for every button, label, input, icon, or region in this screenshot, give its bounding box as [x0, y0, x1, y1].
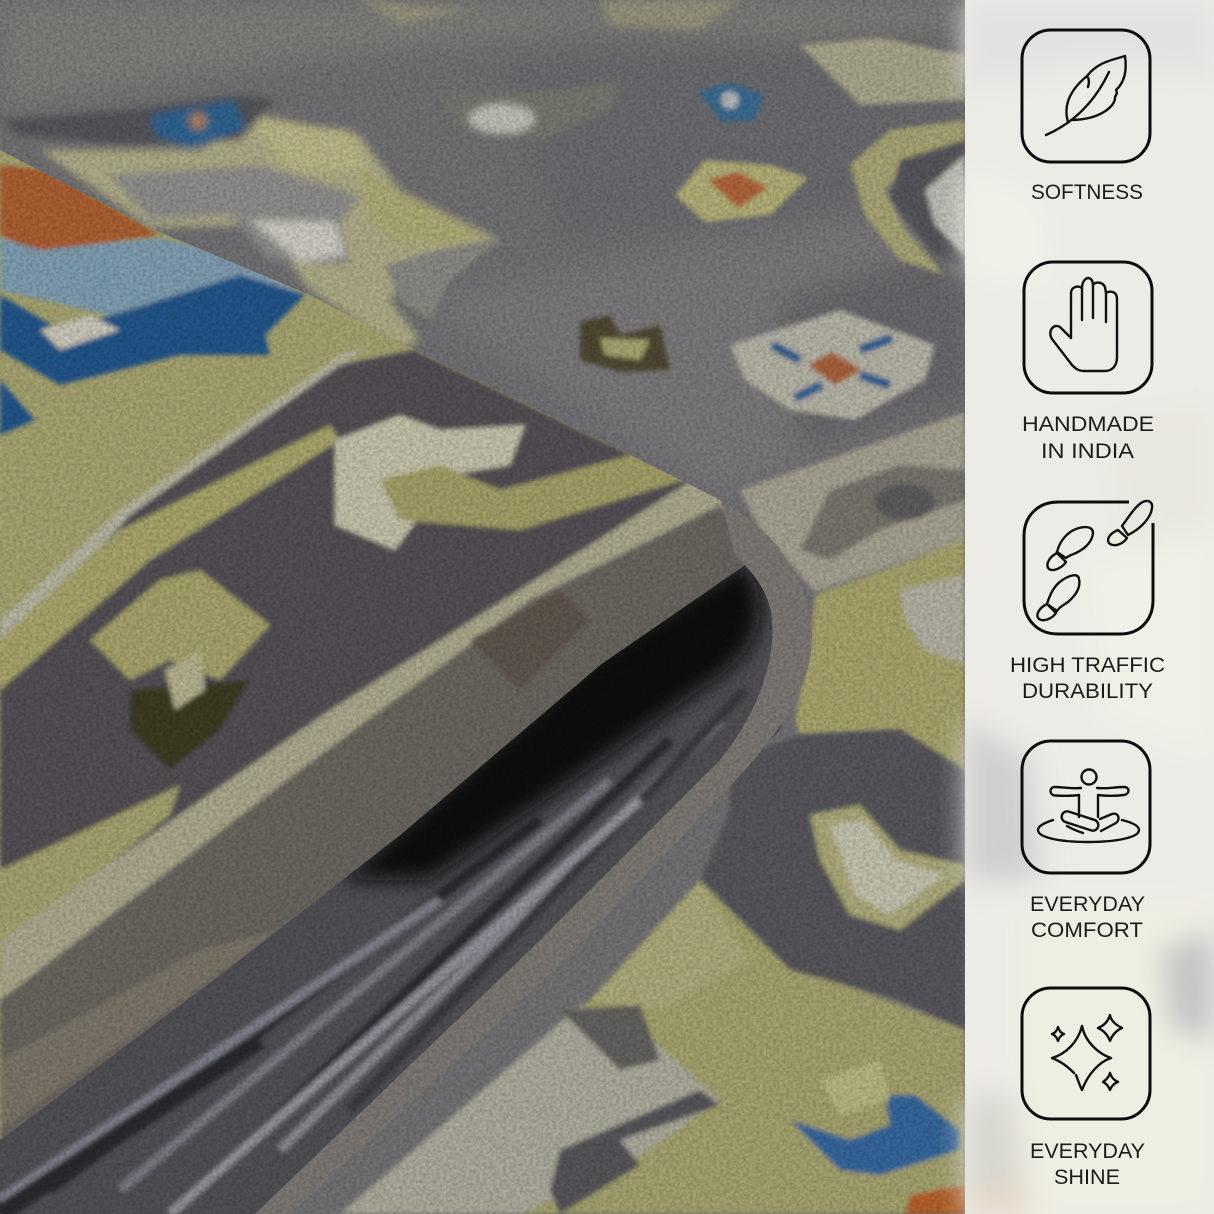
label: everyday comfort: COMFORT [1031, 919, 1143, 942]
label: everyday shine: EVERYDAY [1030, 1140, 1145, 1163]
icon: handmade hand [1024, 262, 1152, 393]
dark cavity under fold [340, 560, 760, 880]
icon: footprints durability [1024, 501, 1153, 634]
label: everyday comfort: EVERYDAY [1030, 893, 1145, 916]
rug photograph [0, 0, 965, 1214]
label: high traffic durability [1010, 654, 1165, 703]
texture [0, 0, 965, 1214]
label: handmade in india [1022, 413, 1154, 463]
panel: features sidebar [965, 0, 1214, 1214]
label: softness: SOFTNESS [1031, 181, 1143, 204]
label: everyday shine [1030, 1140, 1145, 1189]
lower right motif [340, 730, 965, 1214]
underside selvedge [255, 500, 812, 1214]
icon: everyday comfort meditation [1022, 741, 1150, 873]
icon: everyday shine sparkles [1022, 988, 1150, 1119]
cream border band [740, 412, 965, 775]
field flower motifs [385, 38, 965, 420]
background rug field [0, 0, 965, 1214]
label: handmade in india: IN INDIA [1041, 440, 1134, 463]
label: everyday comfort [1030, 893, 1145, 942]
label: everyday shine: SHINE [1054, 1166, 1120, 1189]
icon: softness feather [1022, 30, 1150, 162]
label: high traffic durability: DURABILITY [1022, 680, 1153, 703]
rolled rug face [0, 150, 745, 1140]
rug underside [0, 540, 820, 1214]
upper left cream and olive motif [0, 0, 740, 350]
label: high traffic durability: HIGH TRAFFIC [1010, 654, 1165, 677]
label: handmade in india: HANDMADE [1022, 413, 1154, 436]
